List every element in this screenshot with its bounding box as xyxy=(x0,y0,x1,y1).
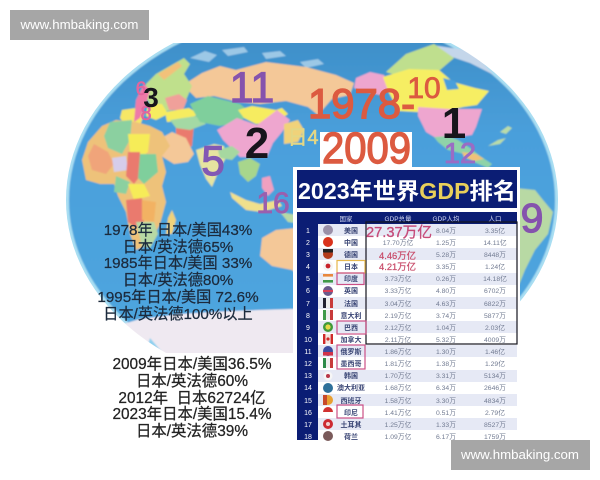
korea and japan xyxy=(284,120,304,144)
hudson bay xyxy=(443,78,459,90)
GDP per capita column: 4.80万 xyxy=(436,287,456,295)
table header: GDP人均 xyxy=(432,214,460,223)
2009: 2009 xyxy=(322,124,411,173)
GDP total column: 1.25万亿 xyxy=(385,420,412,429)
GDP per capita column: 3.74万 xyxy=(436,312,456,320)
GDP total column xyxy=(383,238,414,441)
rank column xyxy=(297,224,318,441)
mexico and central america xyxy=(434,136,492,168)
rank column: 11 xyxy=(304,349,312,356)
population column: 6702万 xyxy=(484,287,506,295)
population column: 5877万 xyxy=(484,312,506,320)
GDP total column: 3.33万亿 xyxy=(385,286,412,295)
number 9: 9 xyxy=(521,195,543,241)
GDP total column: 2.12万亿 xyxy=(385,323,412,332)
rank column: 12 xyxy=(304,361,312,368)
rank column: 10 xyxy=(304,337,312,344)
rank column: 13 xyxy=(304,373,312,380)
country names: 巴西 xyxy=(344,324,358,332)
rank column: 6 xyxy=(306,288,310,295)
4.21 trillion: 4.21万亿 xyxy=(379,261,416,273)
population column: 2.79亿 xyxy=(485,408,505,417)
antarctica xyxy=(124,308,293,353)
GDP total column: 1.41万亿 xyxy=(385,408,412,417)
text block: GDP ratios 1978 to 1995: 日本/英法德65% xyxy=(123,238,233,256)
watermark top left: www.hmbaking.com xyxy=(19,17,138,32)
rank column: 17 xyxy=(304,422,312,429)
japan label and number 4: 日4 xyxy=(287,127,319,149)
GDP per capita column: 3.31万 xyxy=(436,372,456,380)
population column: 2646万 xyxy=(484,384,506,392)
GDP per capita column: 1.30万 xyxy=(436,348,456,356)
population column: 4009万 xyxy=(484,336,506,344)
country names: 西班牙 xyxy=(340,396,362,405)
country names: 印度 xyxy=(344,274,358,283)
population column: 1.29亿 xyxy=(485,359,505,368)
text block: GDP ratios 2009 to 2023: 2023年日本/美国15.4% xyxy=(112,405,272,423)
number 12: 12 xyxy=(444,138,476,170)
population column: 1759万 xyxy=(484,433,506,441)
rank column: 8 xyxy=(306,313,310,320)
GDP per capita column: 1.33万 xyxy=(436,421,456,429)
GDP per capita column: 3.30万 xyxy=(436,397,456,405)
table header: 国家 xyxy=(340,214,353,223)
rank column: 16 xyxy=(304,410,312,417)
rank column: 14 xyxy=(304,385,312,392)
canada xyxy=(383,69,489,112)
number 6: 6 xyxy=(136,79,146,100)
table title: 2023年世界GDP排名 xyxy=(298,178,516,204)
country names: 墨西哥 xyxy=(340,360,362,368)
south america xyxy=(520,188,554,285)
population column xyxy=(483,226,507,441)
population column: 2.03亿 xyxy=(485,323,505,332)
arctic ice xyxy=(190,47,324,68)
watermark bottom right: www.hmbaking.com xyxy=(460,447,579,462)
country names: 澳大利亚 xyxy=(337,383,365,392)
population column: 4834万 xyxy=(484,397,506,405)
usa xyxy=(418,107,482,138)
country names: 日本 xyxy=(344,262,358,271)
rank column: 2 xyxy=(306,240,310,247)
table header xyxy=(297,212,517,224)
population column: 1.24亿 xyxy=(485,262,505,271)
GDP total column: 1.70万亿 xyxy=(385,371,412,380)
GDP per capita column: 5.32万 xyxy=(436,336,456,344)
country names: 德国 xyxy=(344,250,358,259)
number 3: 3 xyxy=(143,82,159,113)
country names: 土耳其 xyxy=(340,420,362,429)
country names: 韩国 xyxy=(344,371,358,380)
GDP total column: 2.19万亿 xyxy=(385,311,412,320)
panel: GDP ranking table xyxy=(293,167,520,441)
table header: GDP总量 xyxy=(384,214,412,223)
4.46 trillion: 4.46万亿 xyxy=(379,250,416,262)
population column: 3.35亿 xyxy=(485,226,505,235)
GDP per capita column: 3.35万 xyxy=(436,263,456,271)
watermark bottom right xyxy=(451,440,590,470)
country names: 英国 xyxy=(344,286,358,295)
text block: GDP ratios 1978 to 1995: 1995年日本/美国 72.6% xyxy=(97,289,259,306)
text block: GDP ratios 2009 to 2023: 2009年日本/美国36.5% xyxy=(112,355,272,373)
GDP per capita column: 1.25万 xyxy=(436,239,456,247)
country names: 法国 xyxy=(344,299,358,308)
world map xyxy=(66,43,558,353)
text block: GDP ratios 1978 to 1995: 日本/英法德100%以上 xyxy=(103,305,253,323)
GDP total column: 3.04万亿 xyxy=(385,299,412,308)
text block: GDP ratios 1978 to 1995 xyxy=(97,222,259,323)
southeast asia xyxy=(238,158,260,182)
GDP total column: 1.09万亿 xyxy=(385,432,412,441)
rank column: 7 xyxy=(306,301,310,308)
rank column: 4 xyxy=(306,264,310,271)
year range heading xyxy=(308,80,415,173)
pink GDP callouts xyxy=(366,224,432,273)
2009 white label background xyxy=(320,132,412,168)
country names: 荷兰 xyxy=(344,432,358,441)
black highlight frame around top ten xyxy=(366,222,517,344)
highlight boxes on country names xyxy=(337,260,366,418)
population column: 1.46亿 xyxy=(485,347,505,356)
GDP total column: 1.68万亿 xyxy=(385,383,412,392)
text block: GDP ratios 2009 to 2023: 2012年 日本62724亿 xyxy=(118,389,266,407)
russia xyxy=(186,62,354,115)
country rank numbers on map xyxy=(136,64,543,241)
GDP per capita column: 1.38万 xyxy=(436,360,456,368)
rank column: 18 xyxy=(304,434,312,441)
population column: 8527万 xyxy=(484,421,506,429)
middle east xyxy=(158,132,194,164)
table title xyxy=(297,170,517,208)
text block: GDP ratios 1978 to 1995: 1985年日本/美国 33% xyxy=(104,255,252,272)
country names xyxy=(337,226,365,441)
number 2: 2 xyxy=(245,119,269,168)
GDP per capita column: 5.28万 xyxy=(436,251,456,259)
27.37 trillion: 27.37万亿 xyxy=(366,224,432,241)
GDP total column: 1.58万亿 xyxy=(385,396,412,405)
text block: GDP ratios 2009 to 2023: 日本/英法德39% xyxy=(136,422,248,440)
number 16: 16 xyxy=(256,187,290,220)
country names: 意大利 xyxy=(340,311,362,320)
mongolia xyxy=(238,106,288,124)
GDP total column: 1.86万亿 xyxy=(385,347,412,356)
rank column: 5 xyxy=(306,276,310,283)
population column: 5134万 xyxy=(484,372,506,380)
number 11: 11 xyxy=(230,64,274,112)
GDP per capita column: 6.34万 xyxy=(436,384,456,392)
alaska xyxy=(354,72,390,95)
text block: GDP ratios 1978 to 1995: 日本/英法德80% xyxy=(123,271,233,289)
country names: 印尼 xyxy=(344,409,358,417)
africa xyxy=(82,120,170,250)
number 5: 5 xyxy=(201,137,225,184)
australia xyxy=(258,227,293,272)
new guinea xyxy=(280,212,293,224)
country names: 中国 xyxy=(344,238,358,247)
GDP total column: 2.11万亿 xyxy=(385,335,411,344)
GDP total column: 1.81万亿 xyxy=(385,359,412,368)
watermark top left xyxy=(10,10,149,40)
country names: 美国 xyxy=(344,226,358,235)
GDP per capita column xyxy=(436,227,456,441)
GDP per capita column: 4.63万 xyxy=(436,300,456,308)
caribbean islands xyxy=(488,126,512,146)
china xyxy=(217,110,290,157)
rank column: 9 xyxy=(306,325,310,332)
country names: 加拿大 xyxy=(340,335,362,344)
table header: 人口 xyxy=(488,215,502,223)
GDP per capita column: 8.04万 xyxy=(436,227,456,235)
GDP total column: 17.70万亿 xyxy=(383,238,414,247)
kazakhstan xyxy=(190,96,250,126)
zebra rows xyxy=(318,224,517,430)
text block: GDP ratios 2009 to 2023 xyxy=(112,355,272,440)
europe xyxy=(144,58,192,112)
country names: 俄罗斯 xyxy=(340,347,362,356)
population column: 6822万 xyxy=(484,300,506,308)
population column: 14.18亿 xyxy=(483,274,507,283)
GDP per capita column: 1.04万 xyxy=(436,324,456,332)
GDP per capita column: 0.51万 xyxy=(436,409,456,417)
number 8: 8 xyxy=(140,103,152,125)
rank column: 1 xyxy=(306,228,310,235)
rank column: 15 xyxy=(304,398,312,405)
GDP per capita column: 0.26万 xyxy=(436,275,456,283)
GDP total column: 3.73万亿 xyxy=(385,274,412,283)
text block: GDP ratios 2009 to 2023: 日本/英法德60% xyxy=(136,372,248,390)
india xyxy=(196,144,226,187)
1978-: 1978- xyxy=(308,80,415,127)
rank column: 3 xyxy=(306,252,310,259)
GDP per capita column: 6.17万 xyxy=(436,433,456,441)
number 10: 10 xyxy=(407,72,441,105)
canada north xyxy=(386,44,454,80)
population column: 8448万 xyxy=(484,251,506,259)
text block: GDP ratios 1978 to 1995: 1978年 日本/美国43% xyxy=(104,222,252,239)
flag icons xyxy=(323,225,333,441)
population column: 14.11亿 xyxy=(483,238,507,247)
number 1: 1 xyxy=(442,99,466,148)
